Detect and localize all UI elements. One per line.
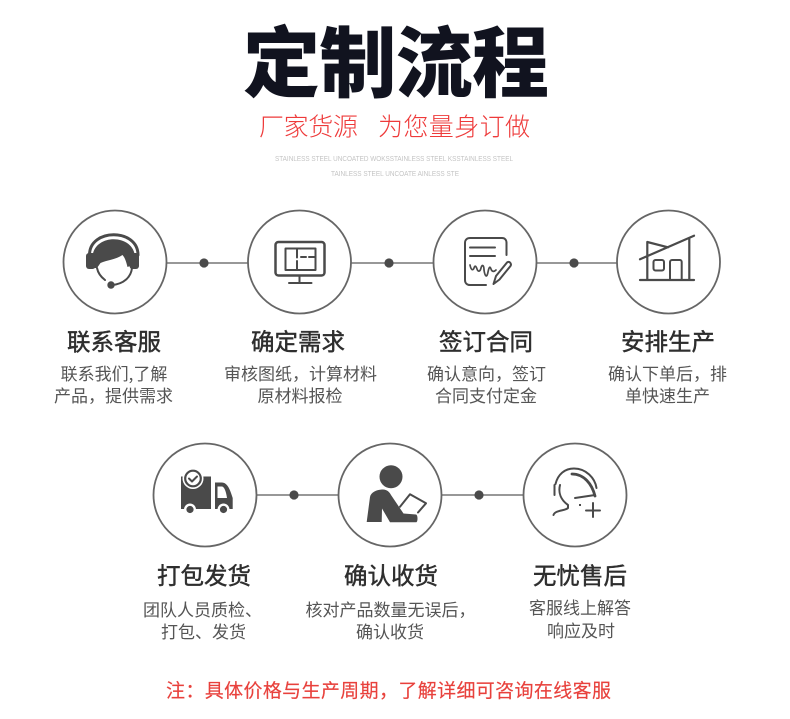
connector row 1 bbox=[166, 258, 619, 268]
heading: 无忧售后 bbox=[533, 557, 627, 591]
description: 核对产品数量无误后， bbox=[306, 596, 476, 621]
icon: factory house bbox=[640, 236, 694, 280]
decorative caption bbox=[275, 154, 513, 178]
description: 客服线上解答 bbox=[529, 594, 631, 619]
description bbox=[224, 360, 377, 407]
description: 原材料报检 bbox=[258, 382, 342, 407]
step: 签订合同 bbox=[427, 210, 546, 407]
description bbox=[143, 596, 262, 643]
title: 定制流程 bbox=[243, 3, 549, 114]
decorative caption: STAINLESS STEEL UNCOATED WOKSSTAINLESS STEEL KSSTAINLESS STEEL bbox=[275, 154, 513, 163]
description: 单快速生产 bbox=[625, 382, 710, 407]
description: 联系我们,了解 bbox=[61, 360, 167, 385]
step: 无忧售后 bbox=[524, 444, 631, 642]
heading: 确认收货 bbox=[344, 557, 438, 591]
icon: delivery truck bbox=[181, 468, 233, 516]
description: 团队人员质检、 bbox=[143, 596, 262, 621]
heading: 确定需求 bbox=[251, 323, 345, 357]
step: 确认收货 bbox=[306, 444, 476, 643]
footnote: 注：具体价格与生产周期，了解详细可咨询在线客服 bbox=[166, 676, 611, 703]
description: 确认意向，签订 bbox=[427, 360, 546, 385]
heading: 安排生产 bbox=[621, 323, 715, 357]
step: 确定需求 bbox=[224, 210, 377, 407]
icon: support agent plus bbox=[554, 468, 600, 517]
description: 确认收货 bbox=[356, 618, 424, 643]
connector row 2 bbox=[256, 490, 524, 500]
step: 安排生产 bbox=[608, 210, 727, 407]
description bbox=[54, 360, 173, 407]
icon: contract with pen bbox=[465, 238, 511, 285]
heading: 联系客服 bbox=[67, 323, 161, 357]
icon: person with tablet bbox=[367, 465, 426, 522]
description bbox=[306, 596, 476, 643]
step: 打包发货 bbox=[143, 444, 262, 643]
subtitle: 为您量身订做 bbox=[378, 108, 530, 144]
description: 打包、发货 bbox=[161, 618, 246, 643]
decorative caption: TAINLESS STEEL UNCOATE AINLESS STE bbox=[331, 169, 459, 178]
description: 审核图纸，计算材料 bbox=[224, 360, 377, 385]
description: 合同支付定金 bbox=[435, 382, 537, 407]
description: 确认下单后，排 bbox=[608, 360, 727, 385]
description bbox=[608, 360, 727, 407]
description bbox=[427, 360, 546, 407]
description: 响应及时 bbox=[547, 617, 615, 642]
description bbox=[529, 594, 631, 642]
subtitle bbox=[259, 108, 530, 144]
icon: customer service headset bbox=[86, 235, 139, 289]
heading: 打包发货 bbox=[157, 557, 251, 591]
subtitle: 厂家货源 bbox=[259, 108, 358, 144]
description: 产品，提供需求 bbox=[54, 382, 173, 407]
icon: monitor with floor plan bbox=[276, 242, 324, 283]
heading: 签订合同 bbox=[439, 323, 533, 357]
step: 联系客服 bbox=[54, 210, 173, 407]
